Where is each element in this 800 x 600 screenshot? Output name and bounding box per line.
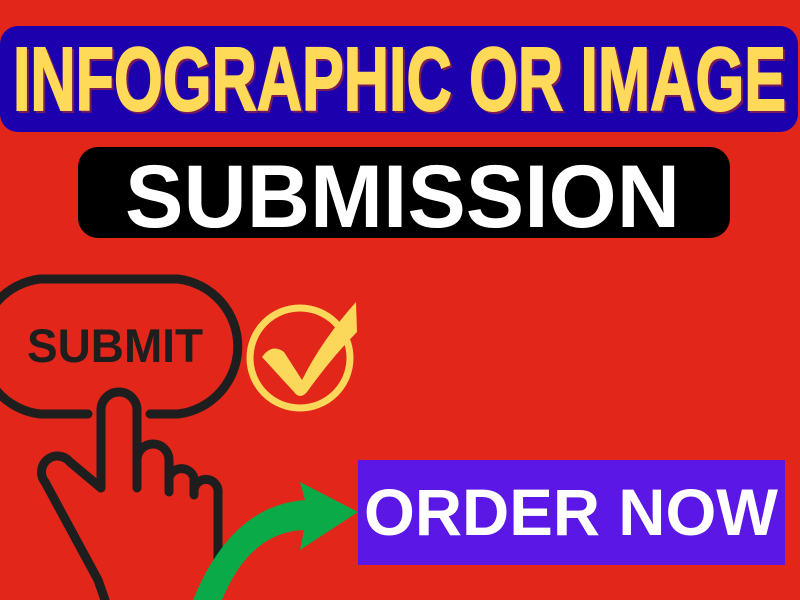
icon: yellow check mark in circle — [250, 302, 357, 408]
icon: submit button with pointing hand: SUBMIT — [27, 319, 203, 372]
icon: submit button with pointing hand — [0, 279, 238, 600]
subtitle banner: SUBMISSION: SUBMISSION — [125, 146, 680, 246]
button: ORDER NOW: ORDER NOW — [364, 475, 779, 549]
button: ORDER NOW — [358, 460, 785, 565]
arrow: green curved arrow to order button — [193, 482, 358, 600]
